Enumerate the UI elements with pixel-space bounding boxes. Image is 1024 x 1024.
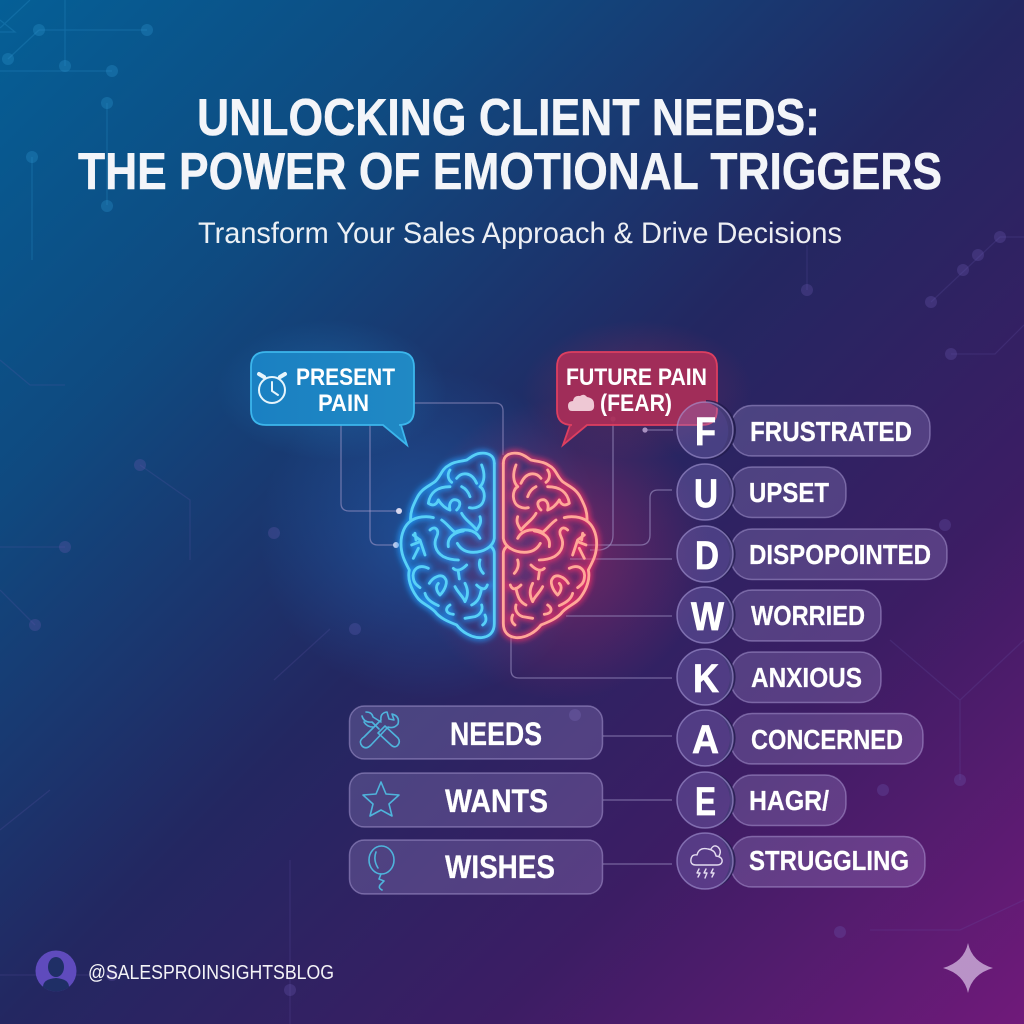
row U: upset [677,464,846,520]
footer handle: @SALESPROINSIGHTSBLOG [88,962,334,984]
icon: cloud [568,395,594,411]
row A: concerned: CONCERNED [751,724,903,755]
row W: worried: W [691,595,724,639]
connector lines [338,403,673,864]
row A: concerned: A [692,718,719,762]
speech bubble: present pain: PRESENT [296,364,395,391]
row D: dispopointed [677,526,947,582]
left panel: wants: WANTS [445,783,548,819]
icon: wrench and screwdriver [360,712,399,748]
row K: anxious: K [693,657,719,701]
row K: anxious [677,649,881,705]
row F: frustrated: FRUSTRATED [750,416,912,447]
row U: upset: U [694,472,718,516]
speech bubble: present pain: PAIN [318,390,369,417]
title [78,89,942,201]
row K: anxious: ANXIOUS [751,662,862,693]
brain glow background [217,320,752,700]
left panel: wishes [350,840,602,894]
footer handle [36,950,334,992]
row cloud: struggling [677,833,925,889]
row D: dispopointed: D [695,534,719,578]
row E: hagry: E [695,780,716,824]
row U: upset: UPSET [749,477,829,508]
row A: concerned [677,710,923,766]
left panel: wants [350,773,602,827]
speech bubble: present pain [251,352,414,445]
subtitle: Transform Your Sales Approach & Drive Decisions [198,217,842,250]
brain: blue left hemisphere [401,453,494,638]
left panel: needs: NEEDS [450,716,542,752]
icon: alarm clock [259,374,285,403]
row D: dispopointed: DISPOPOINTED [749,539,931,570]
title: UNLOCKING CLIENT NEEDS: [197,89,820,147]
row E: hagry [677,772,846,828]
row W: worried: WORRIED [751,600,865,631]
speech bubble: future pain: FUTURE PAIN [566,364,707,391]
brain: red right hemisphere [503,453,597,638]
row F: frustrated: F [695,410,716,454]
icon: balloon [369,846,394,890]
speech bubble: future pain: (FEAR) [600,390,672,417]
row cloud: struggling: STRUGGLING [749,845,909,876]
icon: avatar [36,950,76,992]
row W: worried [677,587,881,643]
left panel: needs [350,706,602,759]
row E: hagry: HAGR/ [749,785,829,816]
icon: star [363,782,399,816]
speech bubble: future pain [557,352,717,445]
row F: frustrated [677,400,930,460]
icon: storm cloud [691,846,722,878]
icon: sparkle [943,943,993,993]
left panel: wishes: WISHES [445,849,555,885]
